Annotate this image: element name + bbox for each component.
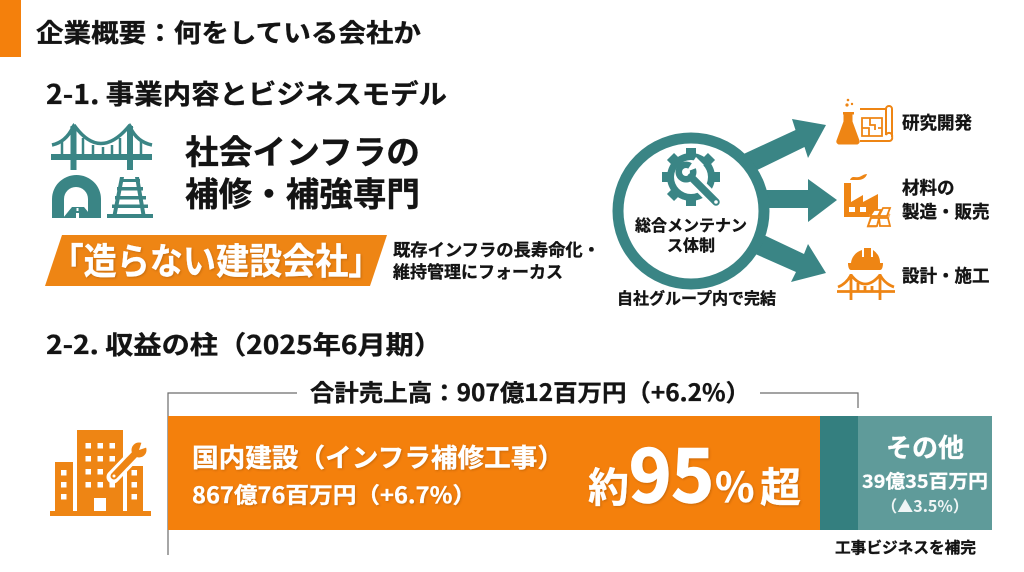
title accent tab	[0, 0, 21, 57]
label: materials manufacturing and sales: 材料の	[902, 175, 954, 200]
bracket: total sales	[168, 393, 858, 555]
segment: domestic construction: 超	[760, 454, 801, 514]
total sales label: 合計売上高：907億12百万円（+6.2%）	[310, 374, 750, 408]
diagram: integrated maintenance system	[618, 119, 837, 284]
icon: building with wrench	[50, 430, 151, 516]
label: design and construction: 設計・施工	[902, 263, 990, 288]
headline: social infrastructure repair: 補修・補強専門	[185, 167, 420, 216]
icon: helmet and bridge	[837, 248, 895, 300]
title: 企業概要：何をしている会社か	[36, 13, 421, 50]
segment: divider	[820, 416, 858, 530]
headline: social infrastructure repair: 社会インフラの	[185, 125, 420, 174]
label: materials manufacturing and sales	[902, 175, 990, 224]
segment: other	[858, 416, 992, 530]
icon: railway track	[107, 177, 153, 218]
arrow: to research	[735, 119, 826, 176]
ring label: ス体制	[667, 232, 715, 256]
text: focus on infrastructure longevity: 維持管理にフォーカス	[393, 258, 563, 283]
label: research: 研究開発	[902, 110, 972, 135]
label: materials manufacturing and sales: 製造・販売	[902, 199, 990, 224]
stacked bar: revenue breakdown	[168, 416, 992, 530]
segment: domestic construction: 95	[629, 418, 714, 523]
ring label: 総合メンテナン	[635, 212, 747, 236]
badge: non-building construction company: 「造らない建設会社」	[50, 232, 382, 285]
text: focus on infrastructure longevity	[393, 236, 600, 283]
segment: domestic construction: 867億76百万円（+6.7%）	[192, 478, 476, 510]
icon: factory and materials	[844, 174, 891, 228]
caption: completed within group: 自社グループ内で完結	[617, 285, 776, 309]
heading 2-1: 2-1. 事業内容とビジネスモデル	[46, 73, 447, 112]
segment: other: 39億35百万円	[862, 468, 988, 494]
ring label	[635, 212, 747, 256]
icon: suspension bridge	[51, 123, 152, 170]
arrow: to materials	[745, 179, 837, 222]
heading 2-2: 2-2. 収益の柱（2025年6月期）	[46, 325, 442, 362]
segment: domestic construction: 国内建設（インフラ補修工事）	[192, 438, 564, 475]
icon: gear and wrench	[662, 148, 720, 206]
segment: domestic construction	[168, 416, 820, 530]
segment: other: その他	[886, 428, 964, 465]
caption: complements construction business: 工事ビジネスを補完	[835, 536, 976, 558]
icon: tunnel	[52, 175, 101, 218]
segment: domestic construction: %	[715, 454, 754, 514]
headline: social infrastructure repair	[185, 125, 420, 216]
text: focus on infrastructure longevity: 既存インフラの長寿命化・	[393, 236, 600, 261]
ring	[618, 138, 764, 284]
arrow: to design and construction	[735, 226, 826, 282]
segment: other: （▲3.5%）	[881, 493, 969, 517]
icon: flask and blueprint	[836, 99, 892, 145]
segment: domestic construction: 約	[588, 454, 629, 514]
